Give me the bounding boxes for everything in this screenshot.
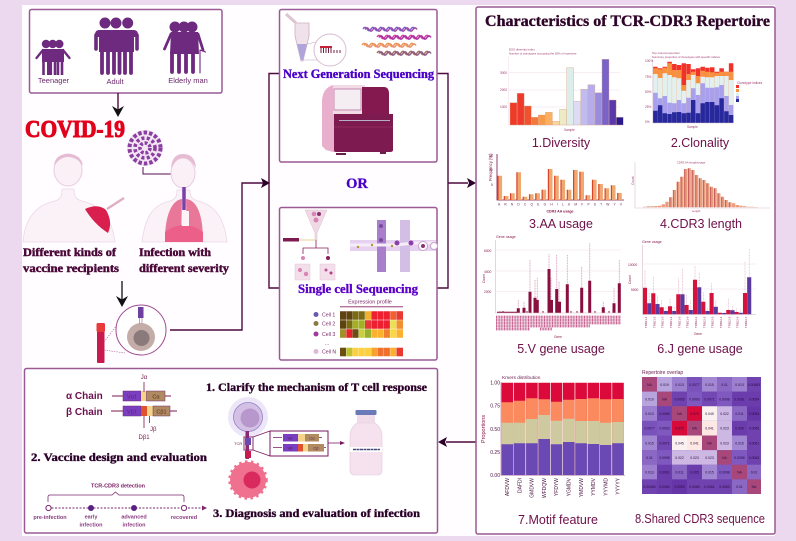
chart 2: clonality: 25% [645, 105, 652, 109]
chart 7: motif feature: 0.50 [490, 427, 500, 433]
chart 8: shared CDR3 sequence: 0.0071 [704, 397, 715, 401]
chart 1: diversity: 1000 [500, 105, 507, 109]
chart 2: clonality: Summary proportion of clonotypes with specific indices [652, 55, 721, 59]
chart 6: J gene usage: Count [628, 275, 632, 284]
chart 8: shared CDR3 sequence: 0.011 [735, 412, 744, 416]
chart 6: J gene usage: TRBJ1-1 [644, 316, 648, 328]
timeline: TCR-CDR3 detection: infection [123, 522, 146, 528]
diagram: alpha and beta chains: β Chain [66, 407, 103, 418]
chart 1: diversity: Sample [564, 128, 575, 132]
chart 8: shared CDR3 sequence: 0.0061 [749, 441, 759, 445]
chart 8: shared CDR3 sequence: Repertoire overlap [642, 370, 683, 376]
chart 8: shared CDR3 sequence: NA [647, 383, 653, 387]
diagram: alpha and beta chains: Cβ1 [156, 410, 167, 416]
label: infection line 2: different severity [139, 263, 229, 275]
title: COVID-19: COVID-19 [25, 117, 125, 143]
chart 8: shared CDR3 sequence: 0.015 [705, 383, 714, 387]
chart 3: AA usage: 15 [489, 154, 493, 158]
chart 6: J gene usage: TRBJ2-4 [719, 316, 723, 328]
panel: age groups [30, 10, 222, 93]
chart 8: shared CDR3 sequence: NA [707, 441, 713, 445]
chart 7: motif feature: YYYMD [603, 478, 609, 496]
chart 8: shared CDR3 sequence: 0.0063 [749, 456, 759, 460]
chart 8: shared CDR3 sequence: 0.005 [735, 427, 744, 431]
chart 8: shared CDR3 sequence: 0.023 [720, 427, 729, 431]
icon: sample tube [286, 14, 318, 61]
chart 6: J gene usage: Gene [694, 332, 702, 336]
chart 7: motif feature [481, 375, 625, 498]
label: Adult: Adult [106, 77, 124, 86]
chart 8: shared CDR3 sequence: NA [752, 485, 757, 489]
chart 8: shared CDR3 sequence: 0.0098 [659, 456, 670, 460]
chart 8: shared CDR3 sequence: 0.0098 [719, 471, 730, 475]
chart 8: shared CDR3 sequence: 0.0053 [674, 485, 685, 489]
icon: flow cell magnifier [314, 34, 346, 66]
timeline: TCR-CDR3 detection: infection [80, 522, 103, 528]
chart 8: shared CDR3 sequence: 0.022 [720, 412, 729, 416]
chart 7: motif feature: Kmers distribution [502, 375, 541, 381]
chart 3: AA usage: 10 [489, 168, 493, 172]
icon: DNA reads [362, 27, 431, 55]
chart 7: motif feature: GMDVW [530, 478, 536, 498]
chart 8: shared CDR3 sequence: 0.023 [720, 441, 729, 445]
timeline: TCR-CDR3 detection [33, 484, 207, 528]
chart 8: shared CDR3 sequence: 0.011 [675, 471, 684, 475]
chart 7: motif feature: YGMDV [566, 477, 572, 496]
chart 8: shared CDR3 sequence: 0.013 [645, 471, 654, 475]
chart 8: shared CDR3 sequence: 0.0071 [659, 441, 670, 445]
chart 2: clonality: Sample [687, 125, 698, 129]
chart 6: J gene usage: TRBJ1-3 [661, 316, 665, 328]
chart 5: V gene usage [482, 235, 621, 339]
caption: 6.J gene usage [657, 342, 743, 356]
chart 8: shared CDR3 sequence: 0.019 [645, 397, 654, 401]
chart 3: AA usage [488, 153, 624, 214]
arrow: virus to patient [143, 167, 180, 177]
chart 8: shared CDR3 sequence: 0.01 [721, 383, 728, 387]
chart 6: J gene usage: TRBJ2-3 [711, 316, 715, 328]
chart 8: shared CDR3 sequence: 0.0093 [689, 397, 700, 401]
chart 8: shared CDR3 sequence: 0.0077 [689, 383, 700, 387]
chart 8: shared CDR3 sequence: 0.013 [735, 383, 744, 387]
chart 8: shared CDR3 sequence: 0.023 [705, 456, 714, 460]
chart 6: J gene usage: 5000 [631, 288, 639, 292]
diagram: alpha and beta chains [66, 375, 177, 441]
chart 8: shared CDR3 sequence: 0.0061 [704, 485, 715, 489]
chart 8: shared CDR3 sequence: 0.0098 [734, 456, 745, 460]
chart 8: shared CDR3 sequence [642, 370, 761, 494]
label: OR: OR [346, 176, 368, 192]
diagram: alpha and beta chains: Dβ1 [138, 435, 150, 441]
chart 8: shared CDR3 sequence: 0.0061 [659, 471, 670, 475]
icon: microfluidic chip [350, 220, 438, 272]
figure: vaccine recipient [23, 154, 124, 242]
heading: Characteristics of TCR-CDR3 Repertoire [485, 13, 770, 30]
chart 8: shared CDR3 sequence: 0.015 [735, 441, 744, 445]
chart 4: CDR3 length [631, 160, 770, 213]
icon: teenagers [36, 40, 70, 75]
chart 8: shared CDR3 sequence: 0.023 [690, 456, 699, 460]
callout: TCR chains [253, 431, 328, 456]
chart 8: shared CDR3 sequence: 0.045 [675, 441, 684, 445]
chart 3: AA usage: A R N D C Q E G H I L K M F P S T W Y V [498, 202, 623, 206]
chart 7: motif feature: YMDVW [579, 478, 585, 497]
arrow: to COVID-19 [112, 93, 124, 117]
chart 8: shared CDR3 sequence: 0.013 [675, 383, 684, 387]
chart 8: shared CDR3 sequence: 0.0061 [734, 397, 745, 401]
arrow: to blood sample [116, 281, 128, 307]
chart 6: J gene usage: TRBJ1-6 [686, 316, 690, 328]
icon: blood tube and PBMC [96, 305, 166, 363]
chart 2: clonality: Top clonal proportion [652, 51, 680, 55]
panel: applications [24, 368, 438, 533]
icon: elderly [164, 22, 206, 73]
chart 5: V gene usage: Gene usage [496, 235, 516, 239]
label: vaccine recipients: Different kinds of [23, 247, 116, 259]
chart 7: motif feature: 0.00 [490, 473, 500, 479]
chart 8: shared CDR3 sequence: 0.01 [751, 471, 757, 475]
label: vaccine recipients line 2: vaccine recipients [23, 263, 120, 275]
chart 7: motif feature: YYMDV [591, 477, 597, 496]
callout: TCR chains: Vα [288, 436, 293, 440]
chart 4: CDR3 length: Length [692, 209, 701, 213]
chart 8: shared CDR3 sequence: 0.041 [690, 441, 699, 445]
chart 6: J gene usage: TRBJ2-2 [702, 316, 706, 328]
chart 8: shared CDR3 sequence: 0.01 [646, 456, 653, 460]
chart 7: motif feature: Proportions [481, 415, 487, 443]
chart 5: V gene usage: 2000 [484, 290, 492, 294]
caption: 3.AA usage [529, 217, 593, 231]
diagram: alpha and beta chains: α Chain [66, 391, 103, 402]
chart 8: shared CDR3 sequence: 0.022 [675, 456, 684, 460]
chart 6: J gene usage [628, 240, 756, 336]
chart 4: CDR3 length: Count [631, 176, 635, 185]
chart 8: shared CDR3 sequence: NA [722, 456, 728, 460]
chart 8: shared CDR3 sequence: 0.0054 [749, 397, 759, 401]
chart 3: AA usage: Frequency (%) [488, 153, 493, 181]
heatmap: expression profile: Cell 2 [322, 322, 335, 328]
label: infection: Infection with [139, 247, 212, 259]
chart 1: diversity: 2000 [500, 88, 507, 92]
chart 6: J gene usage: 10000 [628, 263, 637, 267]
chart 4: CDR3 length: CDR3 AA length/usage [677, 160, 706, 164]
callout: TCR chains: Cβ [313, 446, 319, 450]
heatmap: expression profile: Expression profile [348, 300, 392, 306]
diagram: alpha and beta chains: Jβ [150, 427, 157, 433]
timeline: TCR-CDR3 detection: pre-infection [33, 515, 67, 521]
chart 7: motif feature: 1.00 [490, 380, 500, 386]
icon: adults [95, 18, 138, 73]
chart 6: J gene usage: TRBJ1-5 [677, 316, 681, 328]
chart 7: motif feature: 0.25 [490, 450, 500, 456]
chart 8: shared CDR3 sequence: 0.005 [690, 471, 699, 475]
chart 6: J gene usage: Gene usage [642, 240, 662, 244]
chart 1: diversity: ESS diversity index [509, 48, 535, 52]
chart 1: diversity: Number of clonotypes occupying the 50% of repertoire [509, 52, 577, 56]
chart 8: shared CDR3 sequence: 0.0093 [659, 427, 670, 431]
diagram: alpha and beta chains: Cα [152, 394, 160, 400]
callout: TCR chains: Cα [309, 436, 315, 440]
chart 5: V gene usage: 4000 [484, 270, 492, 274]
connector arrows [170, 74, 476, 447]
chart 8: shared CDR3 sequence: NA [737, 471, 743, 475]
heatmap: expression profile [314, 300, 403, 356]
chart 8: shared CDR3 sequence: 0.072 [690, 412, 699, 416]
figure: infected patient with lungs [142, 154, 227, 242]
chart 8: shared CDR3 sequence: 0.0065 [749, 427, 759, 431]
chart 2: clonality: 0% [645, 120, 650, 124]
chart 7: motif feature: AFDVW [505, 478, 511, 496]
illustration: T cell and infected cell [228, 397, 268, 498]
chart 8: shared CDR3 sequence: 0.0065 [674, 397, 685, 401]
chart 8: shared CDR3 sequence: NA [692, 427, 698, 431]
heatmap: expression profile: ... [325, 341, 329, 347]
heading: diagnosis: 3. Diagnosis and evaluation of infection [213, 508, 421, 520]
chart 7: motif feature: WFDQW [542, 478, 548, 498]
arrow: to vaccine [328, 441, 345, 445]
chart 2: clonality [645, 51, 763, 129]
chart 2: clonality: 100% [645, 59, 653, 63]
chart 8: shared CDR3 sequence: 0.0098 [719, 397, 730, 401]
chart 6: J gene usage: TRBJ1-2 [652, 316, 656, 328]
timeline: TCR-CDR3 detection: recovered [171, 515, 197, 521]
chart 6: J gene usage: TRBJ2-5 [727, 316, 731, 328]
chart 1: diversity [500, 48, 623, 132]
diagram: alpha and beta chains: Vα1 [127, 394, 137, 400]
chart 7: motif feature: 0.75 [490, 404, 500, 410]
chart 5: V gene usage: Count [482, 274, 486, 283]
diagram: alpha and beta chains: Jα [141, 375, 148, 381]
timeline: TCR-CDR3 detection: early [85, 514, 98, 520]
chart 6: J gene usage: TRBJ1-4 [669, 316, 673, 328]
icon: sequencer [322, 85, 393, 155]
chart 8: shared CDR3 sequence: 0.0053 [749, 412, 759, 416]
chart 8: shared CDR3 sequence: 0.015 [705, 471, 714, 475]
caption: 5.V gene usage [517, 342, 605, 356]
chart 6: J gene usage: TRBJ2-6 [736, 316, 740, 328]
label: Elderly man: Elderly man [168, 76, 208, 85]
heatmap: expression profile: Cell 1 [322, 312, 335, 318]
chart 8: shared CDR3 sequence: 0.013 [645, 412, 654, 416]
chart 8: shared CDR3 sequence: 0.0063 [719, 485, 730, 489]
caption: 4.CDR3 length [660, 217, 742, 231]
chart 8: shared CDR3 sequence: 0.0077 [644, 427, 655, 431]
icon: virus [127, 130, 163, 166]
panel: characteristics of TCR-CDR3 repertoire [476, 7, 775, 534]
diagram: alpha and beta chains: Vβ1 [127, 410, 137, 416]
callout: TCR chains: Vβ [288, 446, 293, 450]
chart 8: shared CDR3 sequence: 0.0065 [689, 485, 700, 489]
icon: cell sorting [283, 210, 335, 280]
caption: 2.Clonality [671, 136, 730, 150]
heading: clarify mechanism: 1. Clarify the mechanism of T cell response [206, 382, 427, 394]
caption: 8.Shared CDR3 sequence [635, 512, 765, 526]
chart 8: shared CDR3 sequence: 0.0065 [659, 412, 670, 416]
chart 2: clonality: 75% [645, 75, 652, 79]
chart 8: shared CDR3 sequence: 0.045 [705, 412, 714, 416]
chart 5: V gene usage: 6000 [484, 249, 492, 253]
chart 8: shared CDR3 sequence: NA [677, 412, 683, 416]
label: Teenager: Teenager [38, 76, 70, 85]
chart 7: motif feature: YYYYY [616, 477, 622, 495]
chart 8: shared CDR3 sequence: 0.041 [705, 427, 714, 431]
chart 8: shared CDR3 sequence: 0.015 [645, 441, 654, 445]
timeline: TCR-CDR3 detection: advanced [121, 514, 147, 520]
heading: single cell sequencing: Single cell Sequencing [298, 281, 418, 296]
icon: vaccine vial [350, 410, 382, 475]
chart 1: diversity: 3000 [500, 71, 507, 75]
chart 3: AA usage: CDR3 AA usage [546, 210, 574, 214]
panel: single cell sequencing [280, 208, 438, 360]
chart 2: clonality: Clonotype indices [737, 81, 763, 85]
chart 8: shared CDR3 sequence: 0.072 [675, 427, 684, 431]
chart 8: shared CDR3 sequence: 0.00483 [748, 383, 760, 387]
chart 6: J gene usage: TRBJ2-7 [744, 316, 748, 328]
illustration: T cell and infected cell: TCR [234, 441, 242, 446]
chart 7: motif feature: YFDYW [554, 478, 560, 496]
chart 5: V gene usage: Gene [554, 335, 562, 339]
chart 3: AA usage: 5 [491, 183, 493, 187]
chart 8: shared CDR3 sequence: 0.0054 [659, 485, 670, 489]
chart 8: shared CDR3 sequence: 0.019 [660, 383, 669, 387]
chart 2: clonality: 50% [645, 90, 652, 94]
chart 8: shared CDR3 sequence: NA [662, 397, 668, 401]
chart 8: shared CDR3 sequence: 0.01 [736, 485, 743, 489]
panel: next generation sequencing [280, 10, 437, 162]
caption: 7.Motif feature [518, 513, 598, 527]
chart 8: shared CDR3 sequence: 0.00483 [643, 485, 656, 489]
caption: 1.Diversity [532, 136, 591, 150]
heading: vaccine design: 2. Vaccine design and evaluation [31, 452, 208, 464]
heatmap: expression profile: Cell N [322, 350, 336, 356]
chart 6: J gene usage: TRBJ2-1 [694, 316, 698, 328]
chart 7: motif feature: DAFDI [517, 478, 523, 493]
heatmap: expression profile: Cell 3 [322, 332, 335, 338]
timeline: TCR-CDR3 detection: TCR-CDR3 detection [91, 484, 146, 490]
heading: NGS: Next Generation Sequencing [283, 67, 435, 81]
